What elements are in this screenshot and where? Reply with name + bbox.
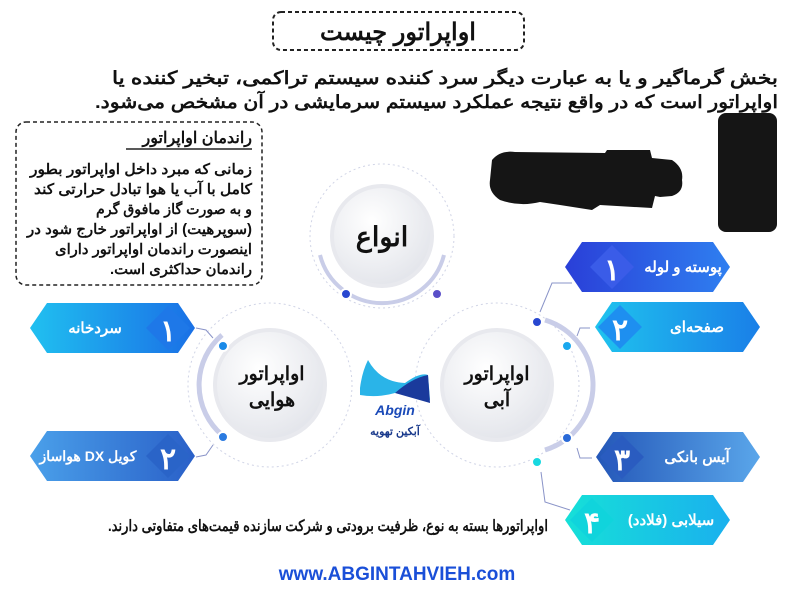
icon: evaporator silhouette bbox=[490, 113, 777, 232]
badge: right 4 flooded: سیلابی (فلادد) bbox=[628, 512, 714, 529]
footer note: اواپراتورها بسته به نوع، ظرفیت برودتی و شرکت سازنده قیمت‌های متفاوتی دارند. bbox=[108, 518, 548, 536]
connectors bbox=[196, 283, 592, 510]
badge: right 1 shell and tube bbox=[565, 242, 730, 292]
title: اواپراتور چیست bbox=[320, 19, 476, 47]
panel: superheat efficiency: (سوپرهیت) از اواپراتور خارج شود در bbox=[26, 222, 252, 239]
intro paragraph: اواپراتور است که در واقع نتیجه عملکرد سیستم سرمایشی در آن مشخص می‌شود. bbox=[95, 90, 778, 113]
website url: www.ABGINTAHVIEH.com bbox=[278, 564, 515, 585]
badge: left 1 cold room bbox=[30, 303, 195, 353]
circle: water evaporator: اواپراتور bbox=[462, 364, 530, 385]
badge: left 2 DX coil: کویل DX هواساز bbox=[39, 448, 137, 465]
panel: superheat efficiency: زمانی که مبرد داخل اواپراتور بطور bbox=[29, 162, 252, 179]
panel: superheat efficiency: راندمان اواپراتور bbox=[142, 130, 252, 148]
badge: right 4 flooded: ۴ bbox=[584, 507, 600, 540]
circle: water evaporator: آبی bbox=[484, 387, 512, 411]
panel: superheat efficiency bbox=[16, 122, 262, 285]
title bbox=[273, 12, 524, 50]
panel: superheat efficiency: کامل با آب یا هوا تبادل حرارتی کند bbox=[34, 179, 253, 198]
intro paragraph: بخش گرماگیر و یا به عبارت دیگر سرد کننده سیستم تراکمی، تبخیر کننده یا bbox=[112, 67, 778, 89]
circle: types: انواع bbox=[356, 222, 408, 254]
badge: right 2 plate: ۲ bbox=[612, 314, 628, 347]
badge: left 1 cold room: سردخانه bbox=[68, 320, 122, 337]
badge: right 2 plate bbox=[595, 302, 760, 352]
badge: right 4 flooded bbox=[565, 495, 730, 545]
badge: right 2 plate: صفحه‌ای bbox=[670, 319, 724, 336]
circle: water evaporator bbox=[415, 303, 593, 467]
circle: types bbox=[310, 164, 454, 308]
circle: air evaporator: هوایی bbox=[249, 390, 295, 411]
logo bbox=[360, 360, 430, 438]
badge: left 2 DX coil: ۲ bbox=[160, 443, 176, 476]
badge: right 3 ice bank: ۳ bbox=[614, 444, 630, 477]
badge: left 1 cold room: ۱ bbox=[160, 315, 176, 348]
intro paragraph bbox=[95, 67, 778, 113]
circle: air evaporator: اواپراتور bbox=[237, 364, 305, 385]
badge: right 1 shell and tube: ۱ bbox=[604, 254, 620, 287]
badge: right 3 ice bank bbox=[596, 432, 760, 482]
panel: superheat efficiency: راندمان حداکثری است. bbox=[110, 262, 252, 278]
logo: آبکین تهویه bbox=[370, 424, 421, 438]
badge: right 3 ice bank: آیس بانکی bbox=[664, 447, 732, 466]
panel: superheat efficiency: اینصورت راندمان اواپراتور دارای bbox=[55, 242, 252, 259]
panel: superheat efficiency: و به صورت گاز مافوق گرم bbox=[96, 200, 252, 218]
badge: right 1 shell and tube: پوسته و لوله bbox=[644, 259, 722, 277]
logo: Abgin bbox=[374, 402, 415, 418]
circle: air evaporator bbox=[188, 303, 352, 467]
badge: left 2 DX coil bbox=[30, 431, 195, 481]
